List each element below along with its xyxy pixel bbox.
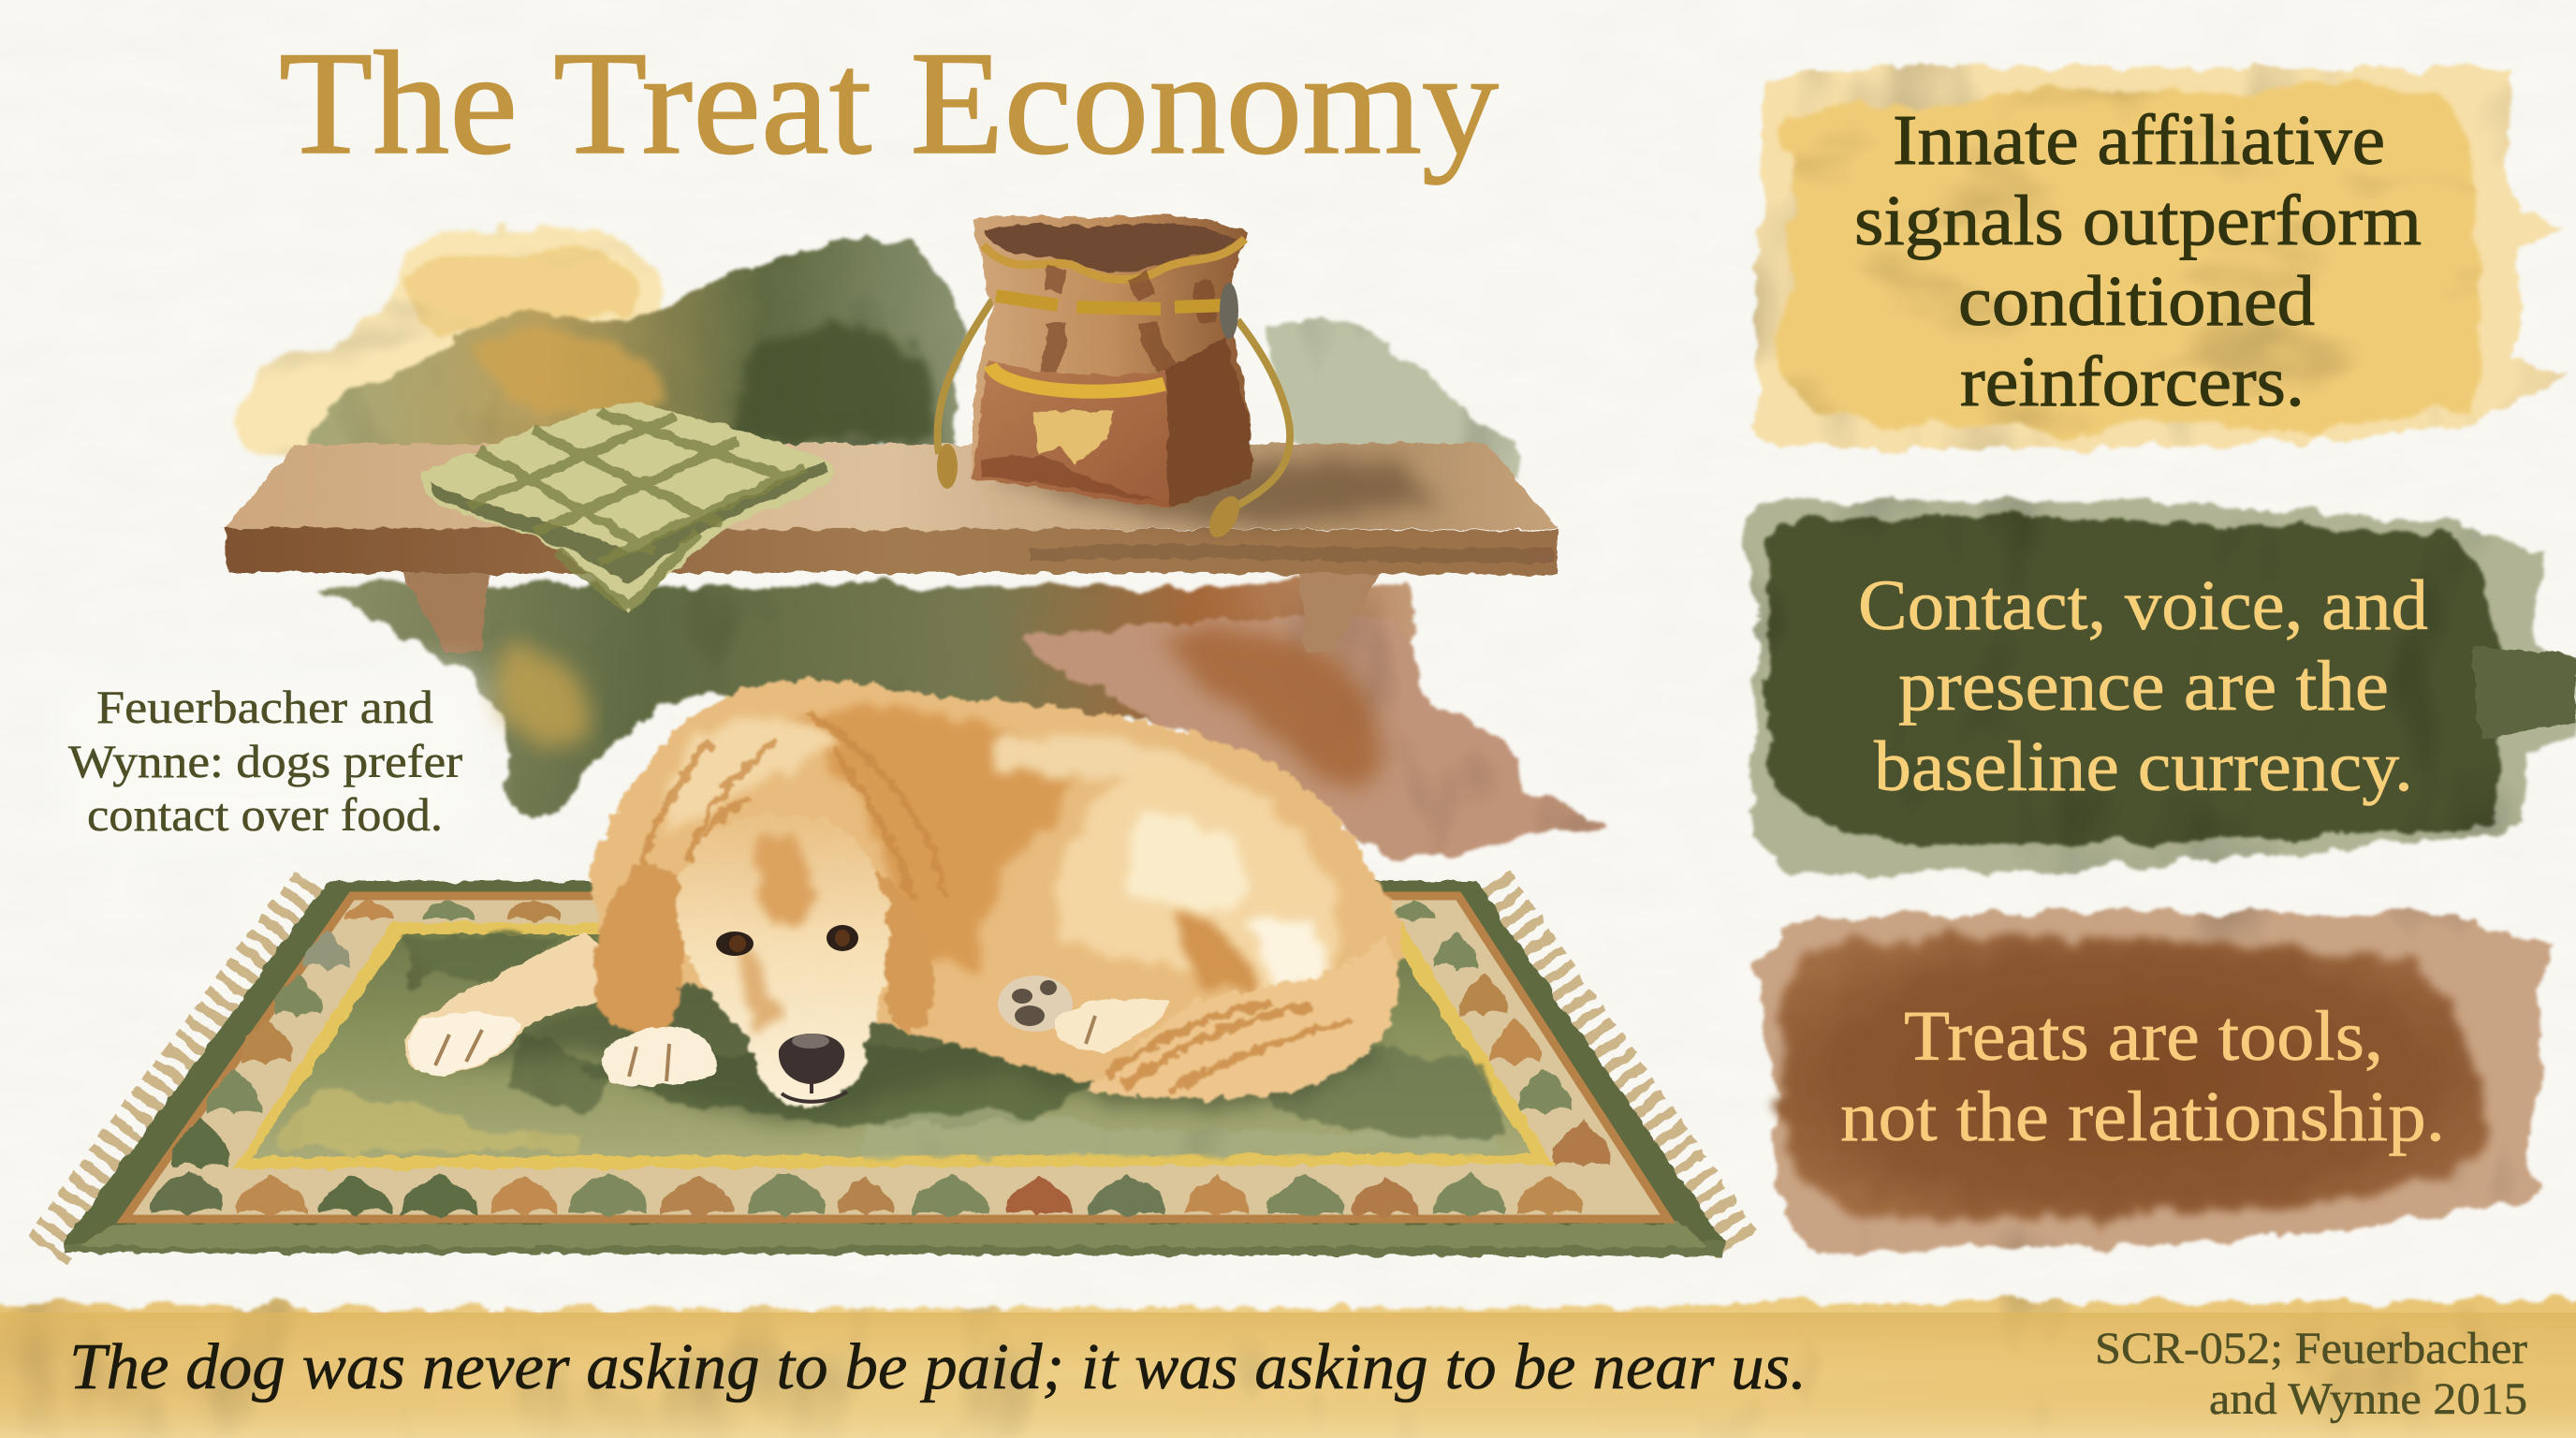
panel text: signals outperform [1854,182,2422,260]
dog head [676,814,888,1107]
rug field washes [271,936,1507,1156]
panel wash inner yellow [1782,89,2481,429]
footer citation: and Wynne 2015 [2209,1374,2527,1424]
dog shadow [421,964,1385,1119]
dog nose [779,1034,844,1084]
bench top [225,444,1558,529]
panel wash outer brown [1752,912,2555,1253]
pouch folds [1046,267,1208,384]
panel: contact, voice, presence [1746,500,2576,875]
side note text: Feuerbacher and [96,681,433,733]
panel: side note [56,674,477,847]
footer wash [0,1299,2576,1438]
rug leaf motifs left [171,901,561,1171]
watercolor wash: olive behind bench [309,234,964,459]
pouch upper body [972,215,1251,508]
panel text [1840,997,2445,1156]
dog fur strands on shoulder [637,712,945,899]
footer quote: The dog was never asking to be paid; it was asking to be near us. [69,1331,1807,1403]
dog toes [435,1016,1095,1081]
dog rear paw pads [998,976,1073,1032]
panel text: presence are the [1898,647,2389,726]
wash brown core [1161,630,1387,788]
panel text: conditioned [1958,262,2315,341]
pouch band [996,296,1226,309]
rug leaf motifs bottom [151,1169,1582,1219]
bench [225,444,1558,653]
dog ear right [874,871,934,1031]
rug dark edge [63,881,1724,1244]
dog body [590,680,1401,1084]
panel text [1858,566,2428,806]
wash dark olive core [730,323,936,440]
pocket brim [990,365,1164,391]
panel: innate signals [1755,67,2569,449]
dog front leg paw tip [408,1012,520,1074]
title: The Treat Economy [279,22,1499,185]
pouch opening [985,224,1236,272]
dog eye right [827,925,858,951]
watercolor wash: olive right of bag [1264,317,1526,477]
rug outer border [63,881,1724,1256]
illustration: dog resting under bench [47,215,1741,1256]
dog tail [1086,936,1397,1099]
dog rear foot [1053,998,1170,1053]
bench bracket right [1300,573,1381,653]
dog nose highlight [792,1034,829,1049]
panel wash inner brown [1781,936,2481,1220]
dog mouth [782,1084,847,1102]
pouch right side [1166,337,1251,508]
dog muzzle shading [739,953,777,1034]
panel wash inner olive [1764,517,2499,844]
bench bracket left [402,573,489,653]
bench grain [1030,544,1554,563]
dog eye left [716,932,754,956]
watercolor wash: brown shadow right of dog [1020,615,1606,857]
panel: treats are tools [1752,912,2555,1253]
rug gold border [232,922,1555,1169]
treat pouch [937,215,1290,542]
rug fringe [47,885,1741,1250]
footer band [0,1299,2576,1438]
footer citation: SCR-052; Feuerbacher [2095,1324,2527,1373]
rug field [253,934,1531,1157]
watercolor wash: under bench ochre patch [496,646,585,745]
panel wash outer olive [1746,500,2576,875]
footer citation [2095,1324,2527,1424]
footer wash shading [0,1313,2576,1438]
panel arm to right edge [2471,646,2576,740]
dog haunch [1057,758,1339,1000]
golden retriever [405,680,1401,1119]
panel text: baseline currency. [1874,727,2413,806]
rug pattern band rule [124,896,1668,1219]
dog haunch orange patch [1170,908,1254,994]
pouch button [1220,283,1238,339]
panel text: not the relationship. [1840,1078,2445,1156]
rug leaf motifs right [1392,901,1611,1169]
pouch rim [983,239,1245,280]
panel text: Innate affiliative [1893,101,2385,180]
pouch tassels [937,444,1246,542]
bag shadow on bench [992,459,1442,529]
dog tail streaks [1105,1002,1348,1091]
panel text: Treats are tools, [1904,997,2383,1076]
pocket highlight [1034,410,1114,463]
wash ochre core [468,331,674,421]
folded napkin [421,402,834,614]
watercolor wash: under bench olive [318,585,1419,821]
rug lighter bottom strip [80,1223,1708,1247]
side note text: Wynne: dogs prefer [68,735,462,787]
dog back light [992,732,1217,779]
dog ear left [595,861,686,1034]
rug pattern band [124,896,1668,1219]
side note text: contact over food. [87,788,443,841]
watercolor wash: yellow behind bench [233,226,674,468]
panel text: reinforcers. [1960,343,2305,421]
bench front edge [225,528,1558,575]
pouch drawstrings [938,298,1290,507]
panel wash outer yellow [1755,67,2569,449]
side note text [68,681,462,841]
panel text: Contact, voice, and [1858,566,2428,645]
dog front leg left [405,932,655,1074]
pouch pocket [973,360,1168,508]
dog flank white [1254,921,1322,992]
dog forehead stripe [757,833,812,927]
dog shoulder light [665,717,833,833]
dog haunch highlight [1123,813,1245,908]
panel text [1854,101,2422,421]
side note glow [56,674,477,847]
rug [47,881,1741,1256]
dog front paw right [601,1027,716,1086]
dog back shading [796,709,1073,974]
pocket lower stain [983,455,1161,501]
